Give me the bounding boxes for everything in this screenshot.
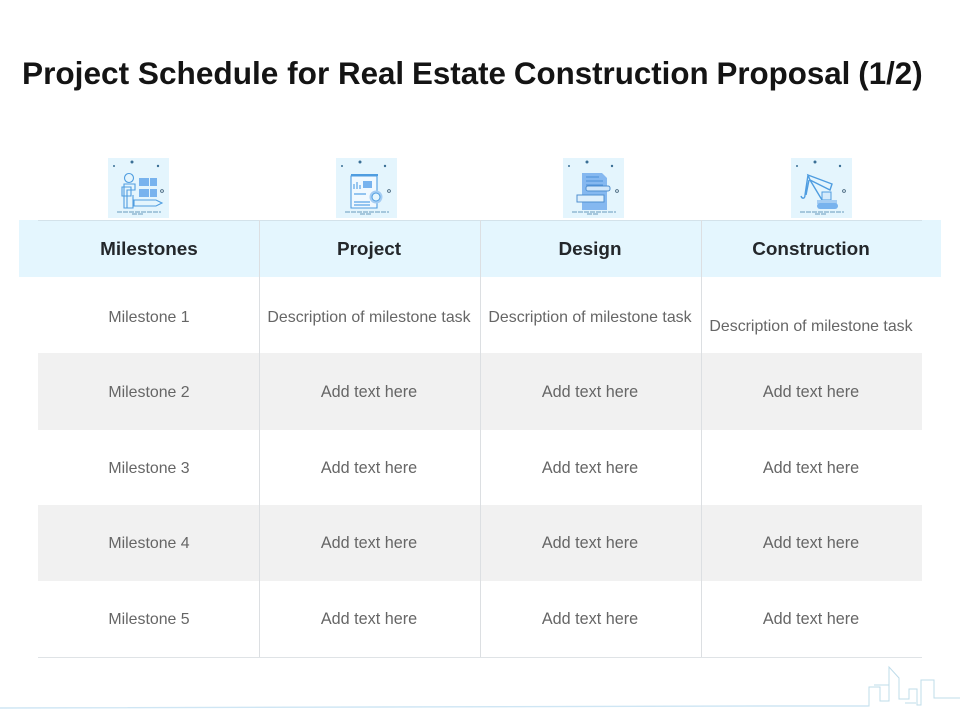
row 1: Description of milestone task (709, 318, 913, 335)
row 1: Description of milestone task (267, 309, 471, 326)
icon: excavator (791, 158, 852, 218)
row 5: Add text here (542, 610, 638, 628)
row 1: Milestone 1 (108, 309, 190, 326)
row 4: Add text here (542, 534, 638, 552)
header: Project: Project (337, 239, 401, 260)
header band (19, 220, 941, 277)
row 1: Description of milestone task (488, 309, 692, 326)
icon: document with gear (336, 158, 397, 218)
row 1 (108, 309, 913, 335)
row 5: Milestone 5 (108, 611, 190, 628)
row 2 (108, 383, 859, 401)
footer: city skyline line (0, 666, 960, 709)
row 2: Milestone 2 (108, 384, 190, 401)
row 2: Add text here (763, 383, 859, 401)
row 2 band (38, 353, 922, 430)
row 3: Add text here (763, 459, 859, 477)
row 3: Add text here (321, 459, 417, 477)
row 4 (108, 534, 859, 552)
row 4 band (38, 505, 922, 581)
header: Construction: Construction (752, 239, 870, 260)
row 4: Add text here (321, 534, 417, 552)
title: Project Schedule for Real Estate Construction Proposal (1/2) (22, 55, 923, 91)
row 2: Add text here (542, 383, 638, 401)
row 4: Add text here (763, 534, 859, 552)
table (19, 220, 941, 658)
row 5 (108, 610, 859, 628)
row 2: Add text here (321, 383, 417, 401)
header: Milestones: Milestones (100, 239, 198, 260)
row 3 (108, 459, 859, 477)
header: Design: Design (559, 239, 621, 260)
icon: person with checklist and pencil (108, 158, 169, 218)
row 3: Milestone 3 (108, 460, 190, 477)
row 5: Add text here (763, 610, 859, 628)
row 3: Add text here (542, 459, 638, 477)
icon: blueprint with pencil and ruler (563, 158, 624, 218)
row 5: Add text here (321, 610, 417, 628)
row 4: Milestone 4 (108, 535, 190, 552)
